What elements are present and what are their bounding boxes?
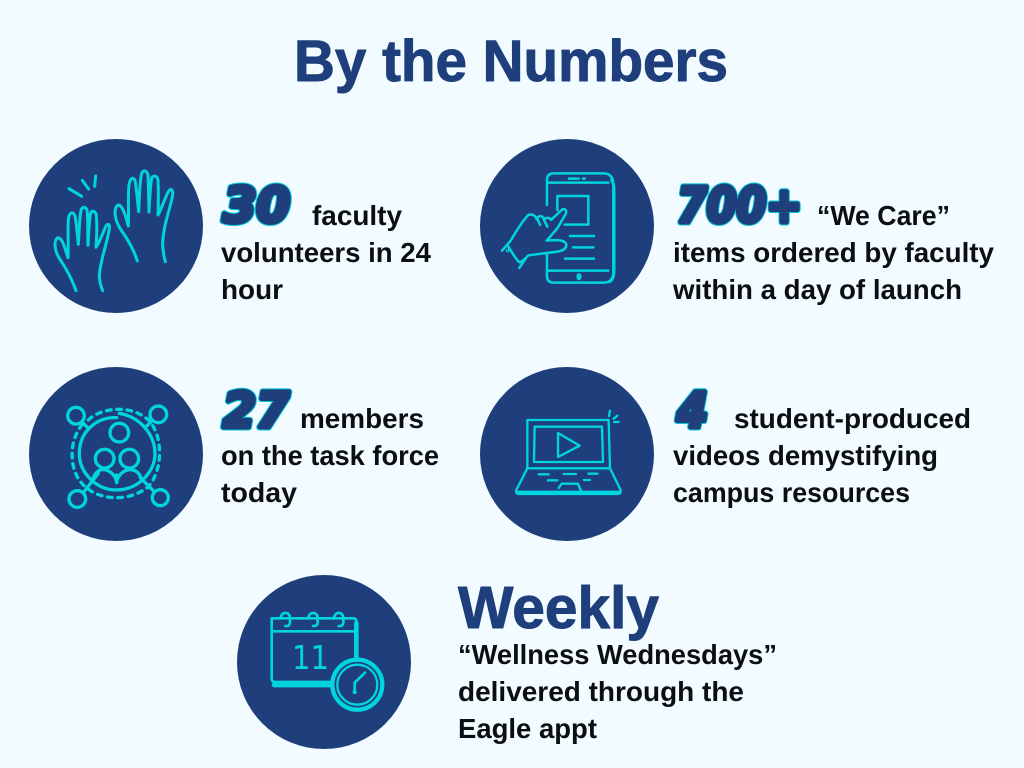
text: We Care items: items ordered by faculty <box>673 237 995 268</box>
text: student videos <box>673 403 971 508</box>
panel: We Care items <box>480 139 995 313</box>
stat number: 27: 27 <box>223 383 290 439</box>
text: Wellness Wednesdays: delivered through the <box>458 676 744 707</box>
text: faculty volunteers: hour <box>221 274 283 305</box>
text: student videos: videos demystifying <box>673 440 938 471</box>
text: student videos: student-produced <box>734 403 971 434</box>
stat number: 4: 4 <box>676 383 708 439</box>
panel: Wellness Wednesdays <box>237 575 777 749</box>
text: task force members: on the task force <box>221 440 439 471</box>
text: We Care items: “We Care” <box>817 200 950 231</box>
panel: task force members <box>29 367 439 541</box>
icon: raised hands <box>29 139 203 313</box>
icon: calendar and clock <box>237 575 411 749</box>
stat number: 700+: 700+ <box>677 178 802 234</box>
panel: student videos <box>480 367 971 541</box>
text: faculty volunteers <box>221 200 432 305</box>
text: Wellness Wednesdays: Eagle appt <box>458 713 597 744</box>
stat number: 30: 30 <box>223 178 290 234</box>
text: task force members <box>221 403 439 508</box>
text: faculty volunteers: faculty <box>312 200 403 231</box>
icon: hand tapping phone <box>480 139 654 313</box>
panel: faculty volunteers <box>29 139 432 313</box>
stat number: 30: 30 <box>223 178 290 234</box>
stat number: 700+: 700+ <box>677 178 802 234</box>
text: We Care items <box>672 200 995 305</box>
text: We Care items: within a day of launch <box>672 274 962 305</box>
stat number: 27: 27 <box>223 383 290 439</box>
stat number: 4: 4 <box>676 383 708 439</box>
text: Wellness Wednesdays: “Wellness Wednesdays” <box>458 639 777 670</box>
icon: group network <box>29 367 203 541</box>
text: task force members: today <box>221 477 298 508</box>
text: Wellness Wednesdays <box>458 639 777 744</box>
heading: Weekly: Weekly <box>458 575 659 641</box>
text: task force members: members <box>300 403 424 434</box>
text: faculty volunteers: volunteers in 24 <box>221 237 432 268</box>
calendar date: 11 <box>292 638 329 677</box>
icon: laptop with play button <box>480 367 654 541</box>
title: By the Numbers <box>294 29 728 94</box>
text: student videos: campus resources <box>673 477 910 508</box>
